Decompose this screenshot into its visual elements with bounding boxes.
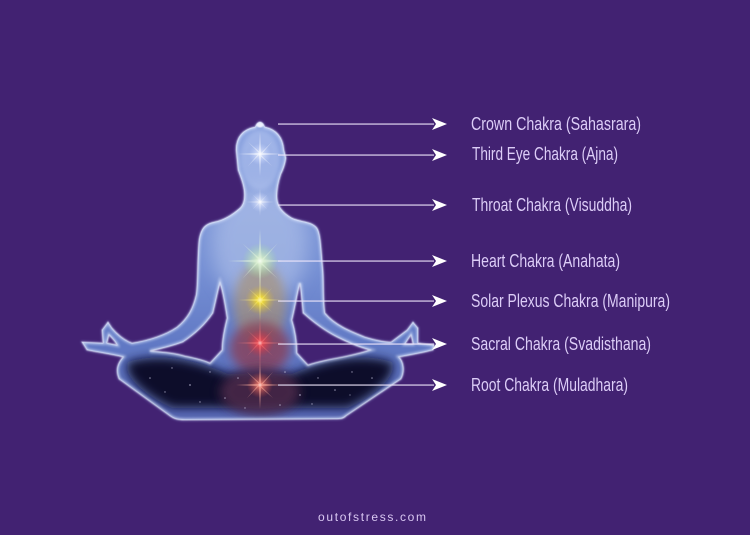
figure bright rim xyxy=(82,122,434,420)
arrow: root xyxy=(278,379,447,391)
chakra: solar plexus xyxy=(238,278,282,322)
starfield xyxy=(149,367,373,409)
dark legs xyxy=(127,358,393,408)
arrow: throat xyxy=(278,199,447,211)
chakra: root xyxy=(236,361,284,409)
label: heart chakra: Heart Chakra (Anahata) xyxy=(471,251,620,271)
meditating figure xyxy=(75,115,445,425)
chakra: sacral xyxy=(236,319,284,367)
arrow: heart xyxy=(278,255,447,267)
arrow: crown xyxy=(278,118,447,130)
label: third eye chakra: Third Eye Chakra (Ajna) xyxy=(472,144,618,164)
chakra: throat xyxy=(246,188,274,216)
label: crown chakra: Crown Chakra (Sahasrara) xyxy=(471,114,641,134)
chakra: third eye xyxy=(238,132,282,176)
arrow: sacral xyxy=(278,338,447,350)
footer: website credit: outofstress.com xyxy=(318,510,426,524)
arrow: third eye xyxy=(278,149,447,161)
label: root chakra: Root Chakra (Muladhara) xyxy=(471,375,628,395)
inner rim glow xyxy=(82,122,434,420)
arrow: solar plexus xyxy=(278,295,447,307)
label: solar plexus chakra: Solar Plexus Chakra (Manipura) xyxy=(471,291,670,311)
label: throat chakra: Throat Chakra (Visuddha) xyxy=(472,195,632,215)
chakra: heart xyxy=(228,229,292,293)
figure outer glow xyxy=(82,122,434,420)
crown tip xyxy=(256,122,264,128)
figure body xyxy=(75,115,445,425)
label: sacral chakra: Sacral Chakra (Svadisthana) xyxy=(471,334,651,354)
